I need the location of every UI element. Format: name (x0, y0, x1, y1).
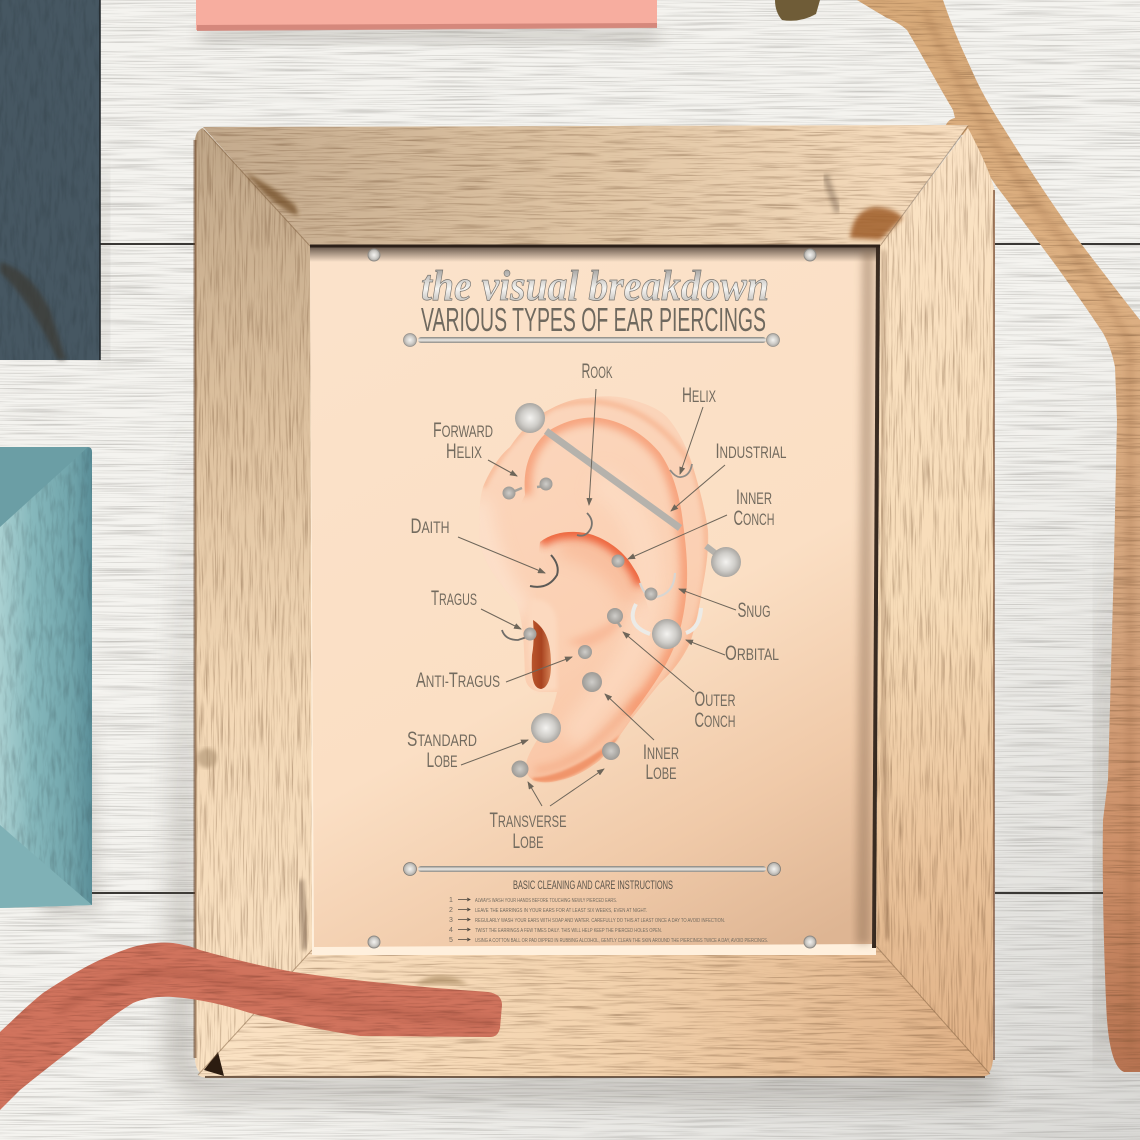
piercing: daith ring (530, 555, 558, 587)
label: Transverse Lobe: LOBE (512, 830, 544, 853)
piercing: transverse lobe studs (512, 742, 620, 778)
label: Orbital: ORBITAL (725, 642, 779, 665)
ear: antihelix shadow near outer conch (565, 612, 625, 648)
instruction 2: 2 (449, 907, 453, 914)
instruction 1: 1 (449, 897, 453, 904)
poster sheet (310, 246, 880, 955)
instruction 3 (449, 917, 725, 924)
title: script: the visual breakdown (421, 263, 769, 310)
teal painted block (0, 447, 92, 908)
instruction 1 (449, 897, 617, 904)
leader arrows (458, 389, 736, 806)
label: Snug: SNUG (738, 599, 770, 622)
pink painted block (196, 0, 657, 31)
label: Inner Lobe: LOBE (646, 761, 676, 784)
ear: canal (532, 620, 551, 689)
subtitle: VARIOUS TYPES OF EAR PIERCINGS (421, 301, 766, 338)
label: Standard Lobe: STANDARD (407, 728, 477, 751)
wooden picture frame (195, 125, 995, 1078)
label: Daith: DAITH (410, 515, 450, 538)
label: Standard Lobe: LOBE (426, 749, 458, 772)
label: Forward Helix: FORWARD (433, 419, 493, 442)
instruction 2: LEAVE THE EARRINGS IN YOUR EARS FOR AT LEAST SIX WEEKS, EVEN AT NIGHT. (475, 908, 647, 914)
label: Anti-Tragus: ANTI-TRAGUS (416, 669, 500, 692)
frame: top rail (203, 125, 968, 246)
label: Forward Helix (433, 419, 493, 463)
label: Standard Lobe (407, 728, 477, 772)
label: Inner Conch (734, 486, 774, 530)
label: Transverse Lobe (490, 809, 566, 853)
label: Industrial: INDUSTRIAL (716, 440, 786, 463)
ear: base shape and shading (481, 396, 708, 782)
label: Inner Lobe (643, 741, 679, 784)
tan branch, top right (857, 0, 1140, 1072)
coral red branch, bottom left (0, 943, 502, 1110)
label: Outer Conch: OUTER (694, 688, 736, 711)
piercing: forward helix (502, 478, 552, 500)
ear: concha hollow (540, 532, 641, 600)
frame: burn marks and edges (195, 126, 994, 1077)
label: Outer Conch (694, 688, 736, 732)
frame: left rail (195, 128, 313, 1073)
piercing: inner lobe stud (582, 672, 602, 692)
dark blue painted block (0, 0, 100, 360)
label: Inner Conch: CONCH (734, 507, 774, 530)
top barbell divider (404, 334, 780, 346)
label: Inner Conch: INNER (736, 486, 772, 509)
piercing: anti-tragus stud (578, 645, 592, 659)
piercing: helix ring (670, 464, 692, 477)
piercing: snug ring (640, 573, 675, 600)
label: Forward Helix: HELIX (446, 440, 482, 463)
corner pins (368, 249, 816, 948)
instruction 5: 5 (449, 937, 453, 944)
instruction 2 (449, 907, 647, 914)
ear: lobe lower shade (533, 735, 620, 782)
frame: bottom rail (198, 946, 990, 1078)
piercing: orbital ring (633, 604, 701, 649)
ear illustration (470, 390, 741, 790)
piercing: rook ring (577, 513, 592, 536)
label: Outer Conch: CONCH (694, 709, 736, 732)
ear: scapha fold under the helix (525, 418, 687, 717)
instruction 1: ALWAYS WASH YOUR HANDS BEFORE TOUCHING NEWLY PIERCED EARS. (475, 898, 617, 904)
bottom barbell divider (404, 862, 780, 876)
care instructions heading: BASIC CLEANING AND CARE INSTRUCTIONS (513, 878, 673, 892)
instruction 4: TWIST THE EARRINGS A FEW TIMES DAILY. THIS WILL HELP KEEP THE PIERCED HOLES OPEN. (475, 928, 662, 934)
piercing: inner conch stud (612, 554, 624, 568)
label: Helix: HELIX (682, 384, 716, 407)
piercing: outer conch stud (607, 608, 623, 627)
instruction 5 (449, 937, 768, 944)
piercing: tragus ring (502, 628, 536, 640)
instruction 5: USING A COTTON BALL OR PAD DIPPED IN RUBBING ALCOHOL, GENTLY CLEAN THE SKIN AROUND THE PIERCINGS TWICE A DAY, AVOID PIERCINGS. (475, 938, 768, 944)
frame: right rail (876, 128, 995, 1074)
instruction 3: REGULARLY WASH YOUR EARS WITH SOAP AND WATER. CAREFULLY DO THIS AT LEAST ONCE A DAY TO AVOID INFECTION. (475, 918, 725, 924)
care instructions list (449, 897, 768, 944)
instruction 3: 3 (449, 917, 453, 924)
piercing: standard lobe stud (531, 713, 561, 743)
label: Transverse Lobe: TRANSVERSE (490, 809, 566, 832)
piercing: industrial barbell (515, 403, 741, 577)
olive twig stub, top (775, 0, 820, 21)
label: Rook: ROOK (582, 360, 613, 383)
instruction 4 (449, 927, 662, 934)
label: Tragus: TRAGUS (431, 587, 477, 610)
instruction 4: 4 (449, 927, 453, 934)
label: Inner Lobe: INNER (643, 741, 679, 764)
ear: tragus light fold (528, 599, 557, 692)
